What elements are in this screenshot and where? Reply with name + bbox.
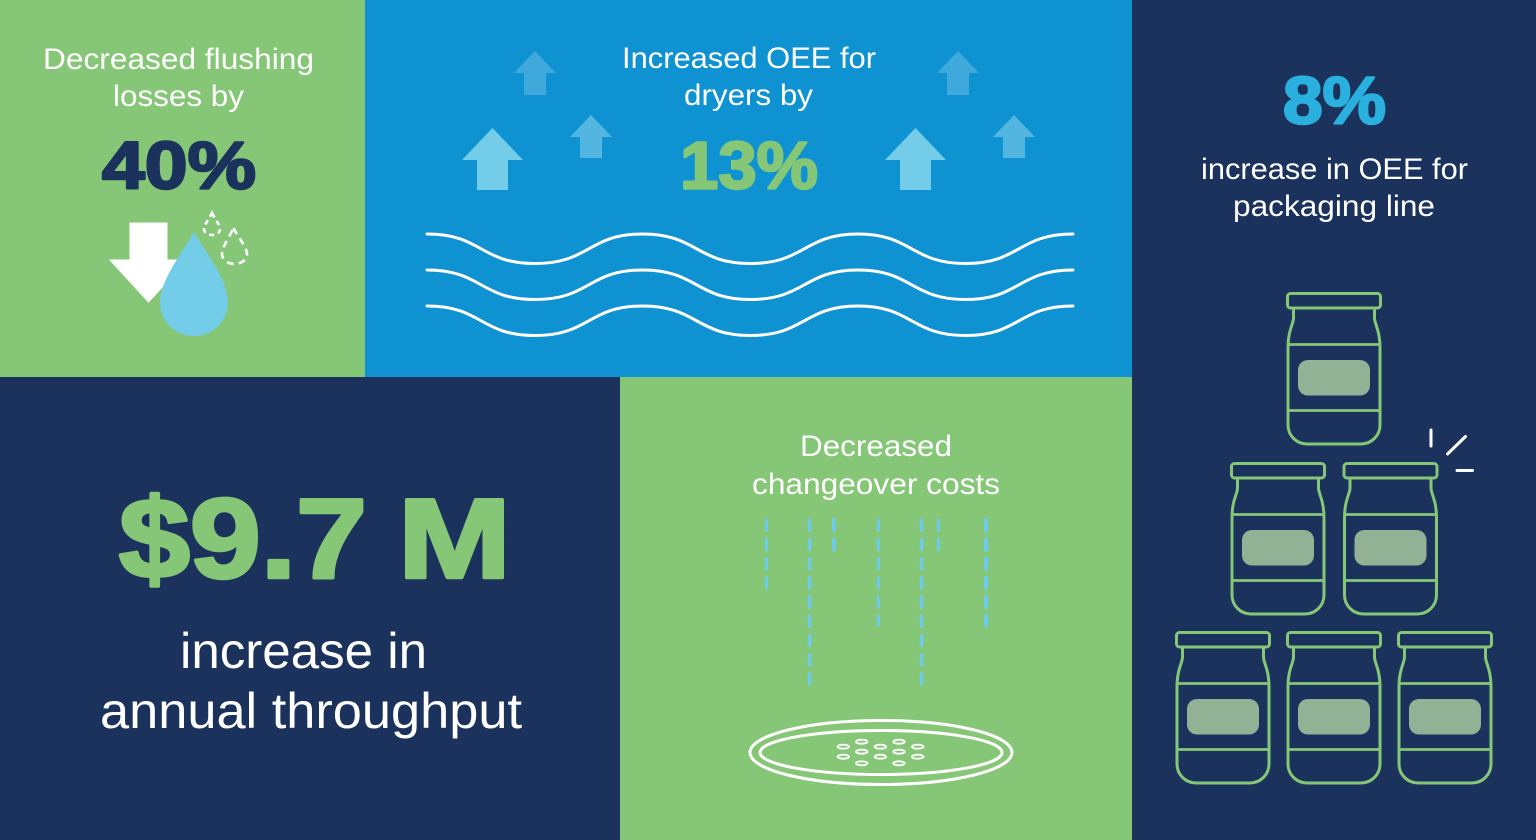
heading: increased OEE for dryers: [622, 42, 876, 112]
icon: drying waves: [427, 234, 1073, 336]
text: increase in annual throughput: increase in: [180, 623, 427, 679]
text: increase in OEE for packaging line: [1201, 153, 1468, 223]
heading: increased OEE for dryers: dryers by: [684, 79, 813, 112]
stat: $9.7 M: M: [398, 476, 511, 602]
icon: drain: [750, 720, 1012, 784]
panel: flushing losses: [0, 0, 365, 377]
icon: large upward arrows: [462, 128, 946, 190]
panel: annual throughput: [0, 377, 620, 840]
heading: decreased flushing losses: [43, 43, 314, 113]
icon: down arrow with water drop: [110, 213, 247, 336]
heading: decreased flushing losses: Decreased flushing: [43, 43, 314, 76]
stat: 13%: 13%: [680, 128, 818, 204]
text: increase in annual throughput: annual throughput: [100, 683, 522, 739]
heading: decreased flushing losses: losses by: [113, 80, 244, 113]
icon: small upward arrows: [514, 51, 1035, 158]
panel: dryers OEE: [365, 0, 1132, 377]
icon: sparkle lines: [1431, 430, 1472, 470]
icon: falling water drips: [766, 520, 986, 684]
icon: stacked jars: [1176, 294, 1492, 783]
heading: decreased changeover costs: Decreased: [800, 430, 952, 463]
text: increase in OEE for packaging line: increase in OEE for: [1201, 153, 1468, 186]
heading: decreased changeover costs: changeover costs: [752, 468, 1000, 501]
heading: increased OEE for dryers: Increased OEE for: [622, 42, 876, 75]
heading: decreased changeover costs: [752, 430, 1000, 501]
text: increase in annual throughput: [100, 623, 522, 739]
panel: changeover costs: [620, 377, 1132, 840]
stat: $9.7 M: $9.7: [119, 476, 367, 602]
text: increase in OEE for packaging line: packaging line: [1233, 190, 1435, 223]
stat: 40%: 40%: [102, 128, 256, 204]
stat: 8%: 8%: [1283, 64, 1386, 138]
panel: packaging line OEE: [1132, 0, 1536, 840]
